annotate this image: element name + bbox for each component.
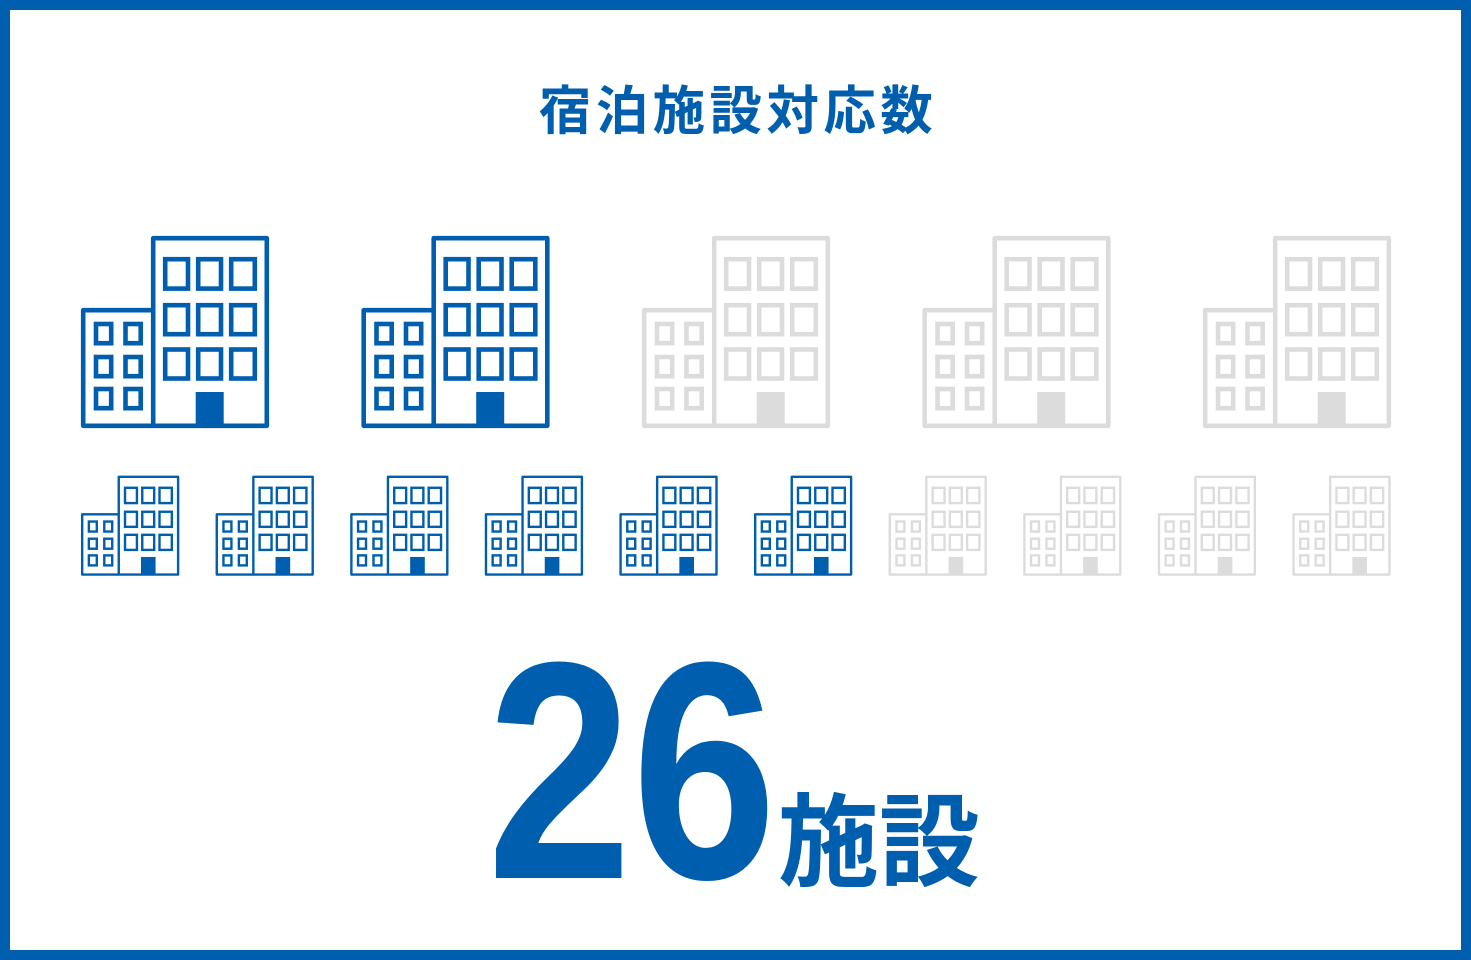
icon: small building 3 active [351,477,447,575]
icon: large building 5 inactive [1205,238,1389,426]
icon: small building 10 inactive [1294,477,1390,575]
icon: large building 2 active [364,238,547,426]
icon: small building 9 inactive [1159,477,1255,575]
big number: 26 [487,598,777,944]
icon: small building 8 inactive [1024,477,1120,575]
icon: small building 2 active [217,477,313,575]
icon: large building 3 inactive [644,238,828,426]
icon: large building 4 inactive [925,238,1108,426]
title: 宿泊施設対応数 [539,82,937,141]
small building icons: 6 of 10 filled [82,477,1390,575]
unit label: 施設 [778,788,980,900]
icon: large building 1 active [83,238,267,426]
icon: small building 6 active [755,477,851,575]
icon: small building 4 active [486,477,582,575]
large building icons: 2 of 5 filled [83,238,1389,426]
icon: small building 5 active [621,477,717,575]
icon: small building 7 inactive [890,477,986,575]
icon: small building 1 active [82,477,178,575]
